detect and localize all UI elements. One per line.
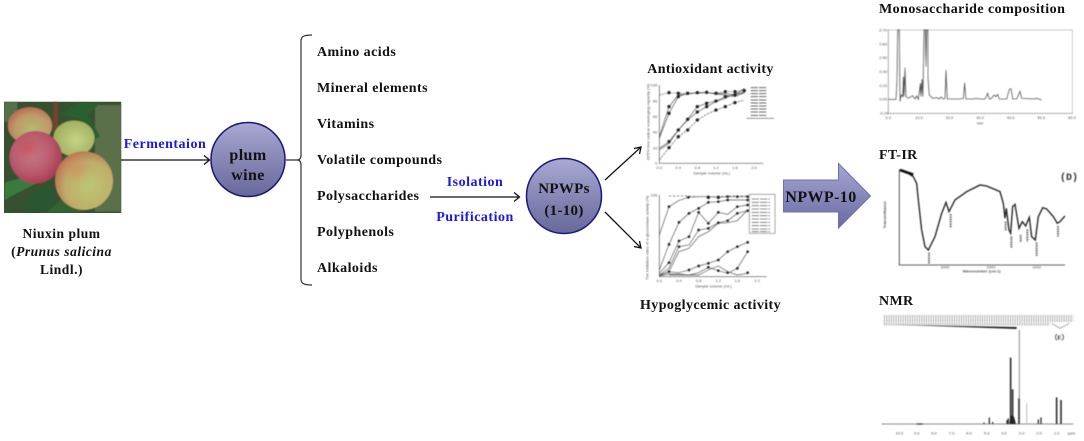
chart: monosaccharide chromatogram: 60.0	[1068, 115, 1077, 120]
circle: NPWPs	[526, 158, 602, 234]
caption: plum name: (Prunus salicina	[11, 244, 112, 259]
chart: monosaccharide chromatogram: 20.0	[945, 115, 954, 120]
caption: plum name: Niuxin plum	[23, 226, 101, 241]
block arrow: NPWP-10	[784, 164, 870, 228]
circle: plum wine: wine	[231, 167, 265, 184]
circle: NPWPs: (1-10)	[544, 203, 584, 219]
chart: NMR spectrum: 6.0	[966, 430, 973, 435]
composition list: Mineral elements	[317, 81, 428, 96]
chart: antioxidant line chart: 40	[653, 130, 658, 135]
chart: FT-IR spectrum: 3000	[941, 264, 950, 269]
arrow: isolation and purification	[430, 192, 520, 202]
chart: monosaccharide chromatogram: 10.0	[915, 115, 924, 120]
chart: hypoglycemic line chart: 2.2	[755, 278, 761, 283]
chart: monosaccharide chromatogram: 50.0	[1037, 115, 1046, 120]
chart: antioxidant line chart: 1.6	[732, 165, 739, 170]
chart: NMR spectrum: 3.0	[1019, 430, 1025, 435]
chart: FT-IR spectrum: Transmittance	[882, 201, 887, 228]
arrow: to antioxidant	[605, 147, 641, 180]
chart: hypoglycemic line chart: 0.8	[696, 278, 702, 283]
chart: NMR spectrum: 9.0	[914, 430, 920, 435]
circle: plum wine	[211, 122, 285, 196]
chart: FT-IR spectrum: 1000	[1032, 264, 1042, 269]
composition list: Polysaccharides	[317, 189, 420, 204]
label: purification: Purification	[436, 210, 514, 225]
chart: antioxidant line chart: 60	[653, 114, 658, 119]
heading: antioxidant: Antioxidant activity	[647, 62, 774, 77]
chart: antioxidant line chart: 2.0	[751, 165, 758, 170]
chart: NMR spectrum: 4.0	[1001, 430, 1008, 435]
chart: NMR spectrum: （E）	[1051, 334, 1068, 342]
chart: FT-IR spectrum: (D)	[1060, 172, 1078, 183]
chart: hypoglycemic line chart	[645, 193, 775, 288]
plum photograph	[4, 102, 121, 213]
chart: monosaccharide chromatogram: 30.0	[976, 115, 985, 120]
chart: antioxidant line chart: 0.4	[676, 165, 682, 170]
chart: NMR spectrum: 10.0	[895, 430, 904, 435]
composition list: Alkaloids	[317, 261, 378, 276]
chart: monosaccharide chromatogram: 40.0	[1007, 115, 1015, 120]
block arrow: NPWP-10: NPWP-10	[785, 189, 857, 206]
heading: hypoglycemic: Hypoglycemic activity	[640, 298, 781, 313]
chart: antioxidant line chart: Sample volume (mL)	[693, 170, 731, 175]
caption: plum name: Lindl.)	[40, 262, 83, 277]
heading: monosaccharide composition: Monosaccharide composition	[879, 2, 1065, 17]
chart: NMR spectrum: 5.0	[984, 430, 990, 435]
chart: NMR spectrum: 8.0	[931, 430, 938, 435]
chart: monosaccharide chromatogram: 0.50	[879, 55, 888, 60]
heading: FT-IR: FT-IR	[879, 148, 918, 163]
circle: plum wine: plum	[229, 147, 267, 164]
composition list: Amino acids	[317, 45, 396, 60]
label: fermentation: Fermentaion	[124, 137, 206, 152]
chart: hypoglycemic line chart: Sample volume (mL)	[695, 283, 732, 288]
chart: antioxidant line chart: 80	[653, 98, 658, 103]
chart: NMR spectrum: 7.0	[949, 430, 955, 435]
heading: NMR: NMR	[879, 294, 914, 309]
composition list: Vitamins	[317, 117, 375, 132]
chart: antioxidant line chart: DPPH free radical scavenging capacity (%)	[645, 83, 650, 160]
chart: FT-IR spectrum: 2000	[987, 264, 996, 269]
chart: antioxidant line chart: 100	[651, 83, 658, 88]
chart: NMR spectrum: 1.0	[1054, 430, 1060, 435]
chart: NMR spectrum: ppm	[1068, 430, 1076, 435]
chart: monosaccharide chromatogram: 0.20	[879, 83, 888, 88]
chart: monosaccharide chromatogram: 0.70	[879, 27, 888, 32]
chart: NMR spectrum: 2.0	[1036, 430, 1043, 435]
chart: FT-IR spectrum: Wavenumber (cm-1)	[963, 269, 1001, 274]
chart: monosaccharide chromatogram: 0.0	[886, 115, 892, 120]
chart: antioxidant line chart: 0.0	[657, 165, 663, 170]
chart: hypoglycemic line chart: 0.4	[676, 278, 683, 283]
chart: antioxidant line chart	[645, 83, 774, 175]
chart: hypoglycemic line chart: 0.0	[657, 278, 663, 283]
composition list: Polyphenols	[317, 225, 394, 240]
chart: hypoglycemic line chart: The inhibition rates of α-glucosidase activity (%)	[645, 195, 650, 280]
label: isolation: Isolation	[447, 175, 503, 190]
chart: monosaccharide chromatogram: min	[977, 120, 983, 125]
chart: monosaccharide chromatogram: 0.60	[879, 41, 888, 46]
chart: monosaccharide chromatogram: 0.40	[879, 69, 888, 74]
chart: monosaccharide chromatogram	[879, 27, 1077, 125]
brace	[286, 35, 312, 285]
chart: FT-IR spectrum	[882, 169, 1078, 274]
chart: NMR spectrum	[882, 317, 1076, 435]
chart: antioxidant line chart: 0.8	[695, 165, 701, 170]
chart: hypoglycemic line chart: 100	[651, 193, 658, 198]
composition list	[317, 45, 443, 276]
chart: antioxidant line chart: 1.2	[713, 165, 720, 170]
arrow: to hypoglycemic	[605, 212, 641, 248]
chart: hypoglycemic line chart: 1.6	[735, 278, 741, 283]
chart: antioxidant line chart: 0	[655, 161, 658, 166]
caption: plum name	[11, 226, 112, 277]
chart: monosaccharide chromatogram: -0.20	[879, 111, 889, 116]
chart: monosaccharide chromatogram: 0.00	[879, 97, 888, 102]
composition list: Volatile compounds	[317, 153, 443, 168]
circle: NPWPs: NPWPs	[538, 181, 590, 197]
chart: hypoglycemic line chart: 1.2	[716, 278, 722, 283]
arrow: fermentation	[121, 156, 210, 164]
chart: antioxidant line chart: 20	[653, 145, 658, 150]
